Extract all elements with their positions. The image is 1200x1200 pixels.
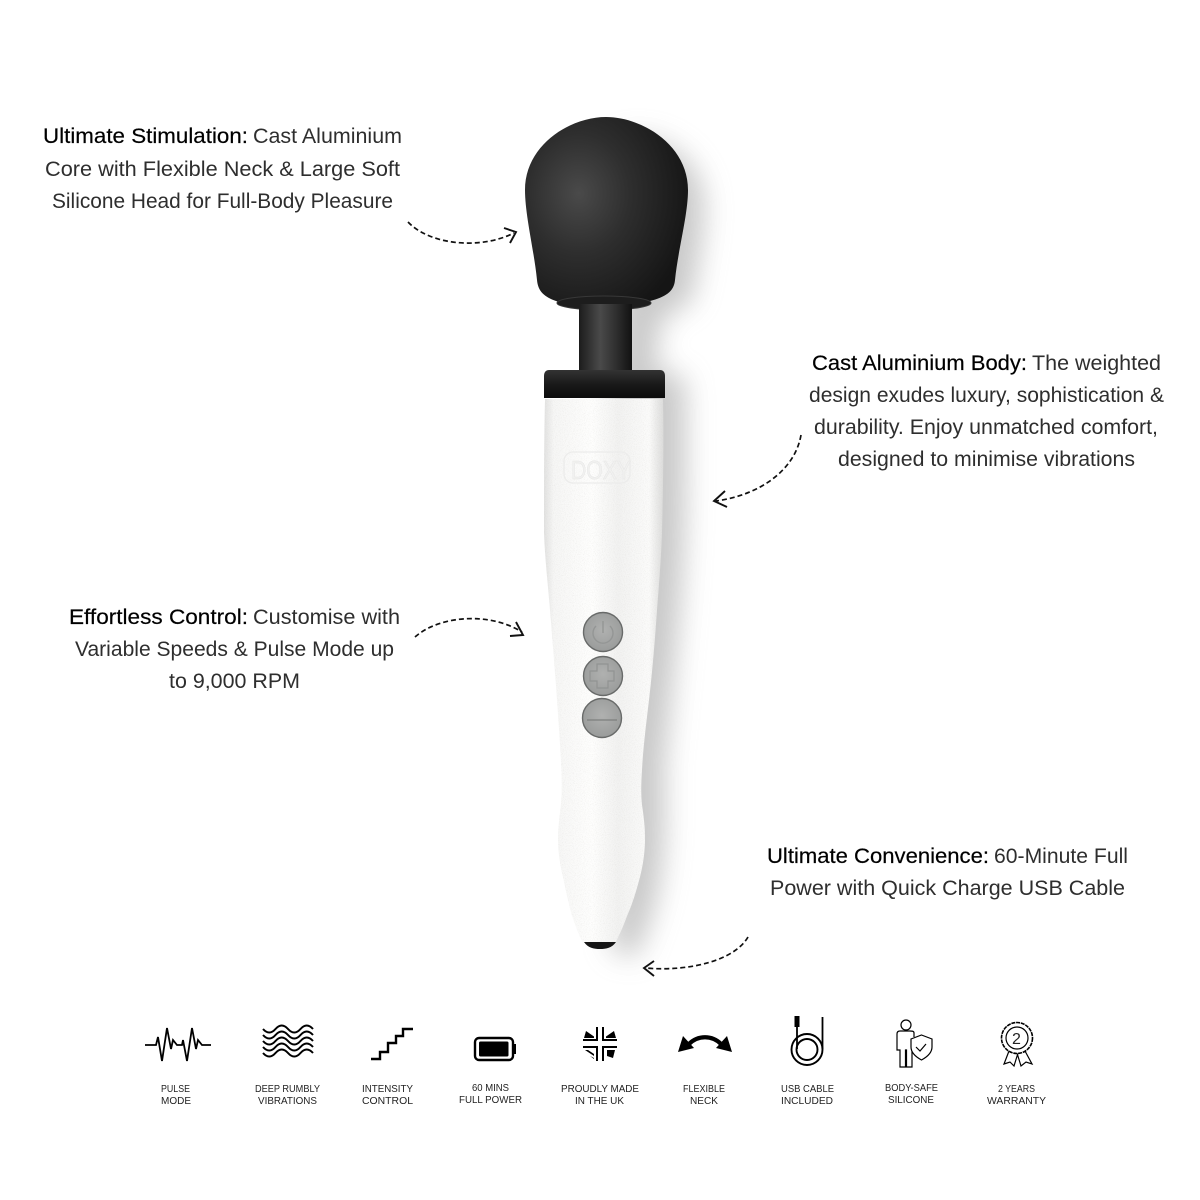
callout: Effortless Control: Variable Speeds & Pulse Mode up — [75, 637, 394, 661]
wand body — [540, 399, 670, 949]
icon: union flag — [583, 1027, 617, 1061]
feature row — [145, 1016, 1046, 1107]
label: PULSE — [161, 1084, 190, 1095]
feature: intensity control — [362, 1029, 414, 1107]
label — [683, 1084, 725, 1107]
icon: curved double arrow — [678, 1036, 732, 1052]
icon: rosette badge: 2 — [1012, 1031, 1021, 1048]
label: WARRANTY — [987, 1096, 1046, 1107]
label: FLEXIBLE — [683, 1084, 725, 1095]
collar ring — [544, 370, 665, 398]
head collar — [557, 296, 651, 310]
label — [255, 1084, 320, 1107]
callout: Cast Aluminium Body: design exudes luxury, sophistication & — [809, 383, 1164, 407]
callout: Effortless Control: to 9,000 RPM — [169, 669, 300, 693]
arrow: to buttons — [415, 619, 523, 637]
icon: stairs — [371, 1029, 413, 1059]
label — [561, 1084, 639, 1107]
icon: pulse wave — [145, 1028, 211, 1061]
icon: battery — [475, 1038, 516, 1060]
label — [161, 1084, 191, 1107]
arrow: to body — [714, 435, 801, 507]
arrow: to head — [408, 222, 516, 243]
tip cap — [584, 942, 616, 949]
label: INTENSITY — [362, 1084, 413, 1095]
power button — [584, 612, 622, 652]
callout: Ultimate Stimulation: Silicone Head for Full-Body Pleasure — [52, 189, 393, 213]
callout: Ultimate Stimulation: Core with Flexible Neck & Large Soft — [45, 157, 400, 181]
callout: Cast Aluminium Body: designed to minimise vibrations — [838, 447, 1135, 471]
product shadow — [600, 138, 704, 958]
callout: Cast Aluminium Body: The weighted — [1032, 351, 1161, 375]
label: DEEP RUMBLY — [255, 1084, 320, 1095]
label — [362, 1084, 414, 1107]
feature: proudly made in the UK — [561, 1027, 639, 1107]
icon: coiled cable — [792, 1016, 822, 1065]
label: SILICONE — [888, 1095, 934, 1106]
callout: Effortless Control: Customise with — [253, 605, 400, 629]
neck — [579, 300, 632, 371]
callout: Ultimate Convenience: Power with Quick Charge USB Cable — [770, 876, 1125, 900]
label: USB CABLE — [781, 1084, 834, 1095]
feature: body-safe silicone — [885, 1020, 938, 1106]
label — [987, 1084, 1046, 1107]
label: NECK — [690, 1096, 718, 1107]
callout: Ultimate Stimulation: Cast Aluminium — [253, 124, 402, 148]
label: MODE — [161, 1096, 191, 1107]
label: VIBRATIONS — [258, 1096, 317, 1107]
feature: USB cable included — [781, 1016, 834, 1107]
silicone head — [525, 117, 688, 308]
callout: Ultimate Convenience: Ultimate Convenience: — [767, 844, 989, 868]
feature: pulse mode — [145, 1028, 211, 1107]
neck top — [579, 304, 632, 312]
callout: Effortless Control: Effortless Control: — [69, 605, 248, 629]
feature: deep rumbly vibrations — [255, 1026, 320, 1107]
label: IN THE UK — [575, 1096, 624, 1107]
icon: person with shield — [897, 1020, 932, 1067]
label: PROUDLY MADE — [561, 1084, 639, 1095]
callout: Cast Aluminium Body: Cast Aluminium Body: — [812, 351, 1027, 375]
feature: flexible neck — [678, 1036, 732, 1107]
label: CONTROL — [362, 1096, 414, 1107]
label — [459, 1083, 522, 1106]
label: 2 YEARS — [998, 1084, 1035, 1095]
feature: 2 years warranty — [987, 1022, 1046, 1107]
embossed DOXY logo — [564, 452, 631, 485]
icon: waves — [263, 1026, 313, 1056]
label: BODY-SAFE — [885, 1083, 938, 1094]
label: 60 MINS — [472, 1083, 509, 1094]
callout: Cast Aluminium Body: durability. Enjoy unmatched comfort, — [814, 415, 1158, 439]
label: INCLUDED — [781, 1096, 833, 1107]
callout: Cast Aluminium Body — [809, 351, 1164, 471]
feature: 60 mins full power — [459, 1038, 522, 1106]
plus button — [584, 656, 622, 696]
callout: Effortless Control — [69, 605, 400, 693]
minus button — [582, 698, 622, 738]
callout: Ultimate Convenience: 60-Minute Full — [994, 844, 1128, 868]
label: FULL POWER — [459, 1095, 522, 1106]
product: wand massager — [525, 117, 704, 958]
label — [885, 1083, 938, 1106]
embossed DOXY logo: DOXY — [571, 455, 631, 485]
callout: Ultimate Convenience — [767, 844, 1128, 900]
callout: Ultimate Stimulation — [43, 124, 402, 213]
callout: Ultimate Stimulation: Ultimate Stimulation: — [43, 124, 248, 148]
label — [781, 1084, 834, 1107]
arrow: to base — [644, 937, 748, 976]
